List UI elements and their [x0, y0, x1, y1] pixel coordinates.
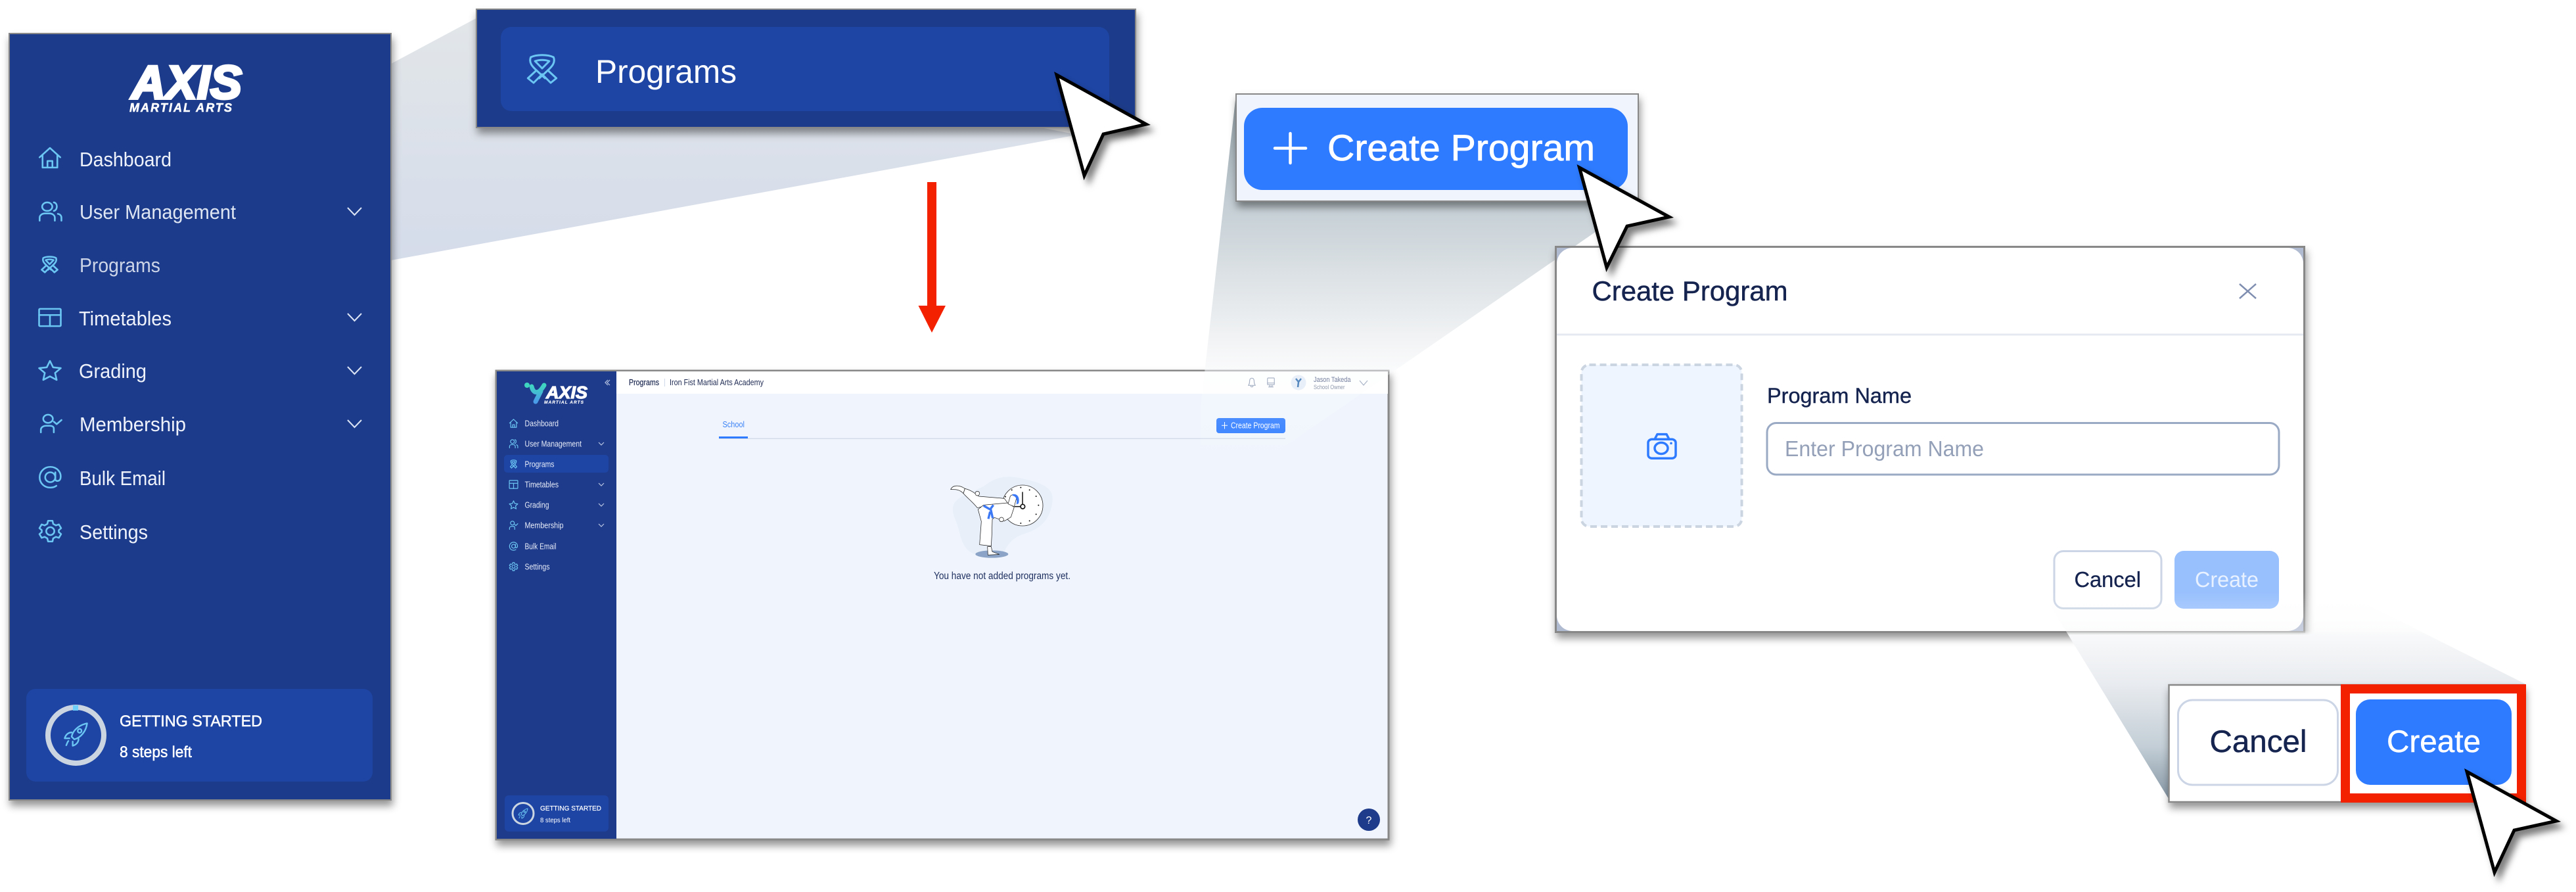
zoom wedge: modal buttons to callout — [2042, 592, 2526, 799]
menu: navigation items: Settings — [80, 521, 148, 544]
menu: navigation items: Membership — [80, 413, 186, 436]
button: Create Program small — [1216, 418, 1285, 433]
card: getting started — [26, 689, 373, 782]
mini sidebar: Dashboard — [524, 419, 559, 429]
mini sidebar: User Management — [524, 439, 582, 448]
button: Create: Create — [2387, 724, 2481, 759]
menu: navigation items: User Management — [80, 200, 236, 223]
highlight: red box — [2345, 689, 2521, 798]
mini getting started card: 8 steps left — [540, 817, 570, 824]
card: getting started: GETTING STARTED — [120, 713, 262, 730]
illustration: karate kick and clock — [951, 477, 1053, 558]
logo: AXIS Martial Arts: MARTIAL ARTS — [129, 101, 232, 114]
button: Cancel: Cancel — [2209, 724, 2307, 759]
zoom wedge: sidebar row to Programs callout — [391, 18, 1078, 260]
mini sidebar: Settings — [524, 563, 549, 572]
panel: Programs page screenshot — [496, 371, 1389, 839]
callout: Programs menu row — [476, 9, 1136, 128]
menu: navigation items: Bulk Email — [80, 467, 166, 490]
button: Cancel — [2178, 700, 2338, 785]
mini getting started card — [505, 795, 609, 832]
icon: close — [2240, 284, 2256, 298]
menu: navigation items: Grading — [79, 360, 147, 383]
label: Create Program: Create Program — [1327, 127, 1595, 168]
mini getting started card: GETTING STARTED — [540, 805, 601, 812]
cursor: Create Program click — [1580, 168, 1669, 268]
field: Program Name — [1767, 384, 2279, 475]
tabs: School: School — [723, 420, 745, 429]
page header — [616, 371, 1388, 394]
tabs: School — [719, 420, 1285, 439]
mini sidebar: Timetables — [524, 480, 559, 489]
image upload placeholder — [1581, 365, 1741, 527]
help button — [1358, 809, 1380, 831]
mini sidebar: Programs — [524, 460, 555, 469]
menu: navigation items: Programs — [80, 254, 160, 277]
page header: School Owner — [1314, 384, 1345, 391]
mini logo: AXIS — [545, 383, 588, 402]
field: Program Name: Program Name — [1767, 384, 1912, 408]
callout: Cancel and Create buttons — [2169, 685, 2523, 802]
button: Create disabled: Create — [2195, 567, 2259, 592]
mini sidebar: Membership — [524, 521, 564, 530]
panel: Create Program modal — [1556, 247, 2304, 632]
logo: AXIS Martial Arts: AXIS — [130, 57, 242, 109]
zoom wedge: Create Program button to callout — [1201, 94, 1638, 460]
text: empty state message: You have not added programs yet. — [934, 571, 1070, 582]
button: Create Program small: Create Program — [1231, 421, 1280, 430]
page header: Programs — [629, 378, 659, 387]
mini sidebar: Bulk Email — [524, 542, 556, 551]
panel: large sidebar — [9, 34, 391, 800]
modal title: Create Program — [1592, 275, 1787, 306]
page header: Jason Takeda — [1314, 376, 1351, 384]
field: Program Name: Enter Program Name — [1785, 436, 1984, 461]
menu: navigation items: Timetables — [79, 307, 172, 330]
mini sidebar — [497, 371, 616, 839]
cursor: Create click — [2467, 772, 2556, 872]
label: Programs: Programs — [595, 53, 737, 90]
button: Cancel — [2054, 551, 2161, 609]
icon: belt ribbon — [528, 55, 557, 83]
mini logo — [524, 383, 588, 405]
button: Create — [2356, 699, 2512, 785]
icon: plus — [1275, 133, 1306, 163]
button: Create disabled — [2174, 551, 2279, 609]
mini logo: MARTIAL ARTS — [544, 400, 584, 405]
mini sidebar: Grading — [524, 501, 549, 510]
page header: Iron Fist Martial Arts Academy — [670, 378, 764, 387]
button: Cancel: Cancel — [2074, 567, 2141, 592]
arrow: red down arrow — [919, 182, 946, 333]
callout: Create Program button — [1236, 94, 1638, 201]
help button: ? — [1366, 815, 1372, 826]
card: getting started: 8 steps left — [120, 743, 192, 761]
menu: navigation items: Dashboard — [80, 148, 172, 171]
menu: navigation items — [39, 148, 361, 544]
cursor: Programs click — [1057, 75, 1146, 176]
